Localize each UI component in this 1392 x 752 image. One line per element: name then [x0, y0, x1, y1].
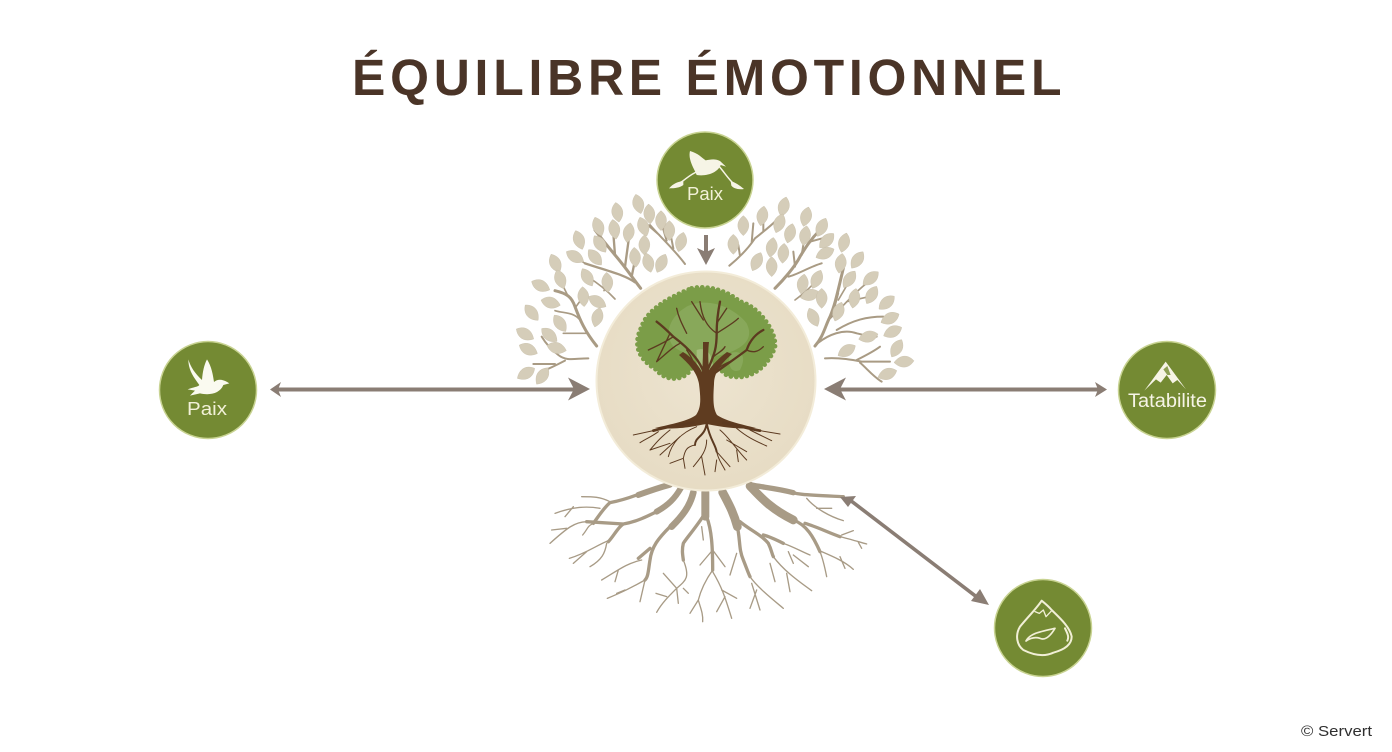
central circle [596, 272, 816, 490]
canopy [637, 287, 775, 379]
title: ÉQUILIBRE ÉMOTIONNEL [352, 49, 1062, 106]
trunk [655, 342, 756, 429]
node: top peace [657, 132, 753, 228]
root trunks [638, 485, 793, 527]
arrow: top downward [697, 235, 715, 265]
tree roots [633, 423, 780, 475]
node: right stability [1118, 342, 1216, 438]
arrow: diagonal to bottom-right [840, 496, 989, 605]
icon: mountain [1144, 362, 1186, 391]
left branches [533, 222, 685, 372]
copyright: © Servert [1301, 723, 1373, 740]
label: Tatabilite [1128, 391, 1207, 412]
node: bottom right [994, 580, 1092, 676]
left leaves [514, 193, 689, 387]
icon: mountain drop with bird [1017, 601, 1072, 655]
label: Paix [687, 184, 723, 204]
underground roots [550, 485, 867, 622]
icon: bird with legs [669, 151, 744, 189]
root mid sections [587, 490, 843, 580]
branches [648, 302, 763, 377]
root tips [550, 497, 867, 622]
arrow: right double-headed [824, 378, 1107, 400]
icon: dove [188, 359, 229, 396]
right branches [729, 217, 890, 382]
node: left peace [160, 342, 256, 438]
arrow: left double-headed [270, 378, 590, 400]
tree illustration [633, 287, 780, 475]
upper foliage branches [514, 193, 914, 387]
right leaves [728, 196, 914, 383]
label: Paix [187, 399, 227, 419]
